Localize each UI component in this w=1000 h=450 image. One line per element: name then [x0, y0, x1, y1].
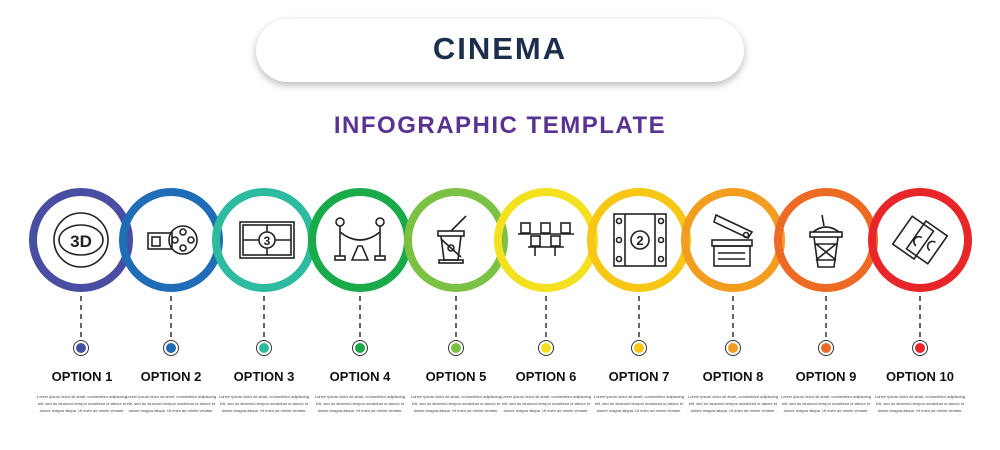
icon: 3D: [54, 213, 108, 267]
description texts: elit, sed do eiusmod tempor incididunt ut labore et: [220, 401, 308, 406]
option 7: OPTION 7: [609, 369, 669, 384]
option 4: [312, 192, 408, 384]
description texts: dolore magna aliqua. Ut enim ad minim veniam.: [691, 408, 775, 413]
subtitle: INFOGRAPHIC TEMPLATE: [334, 112, 666, 139]
description texts: dolore magna aliqua. Ut enim ad minim veniam.: [129, 408, 213, 413]
option 2: [123, 192, 219, 384]
description texts: Lorem ipsum dolor sit amet, consectetur adipiscing: [411, 394, 501, 399]
option 1: [33, 192, 129, 384]
description texts: elit, sed do eiusmod tempor incididunt ut labore et: [876, 401, 964, 406]
icon: soda cup: [438, 216, 466, 263]
option 9: [778, 192, 874, 384]
icon: film strip 2: 2: [636, 233, 644, 248]
description texts: elit, sed do eiusmod tempor incididunt ut labore et: [782, 401, 870, 406]
description texts: [37, 394, 965, 413]
description texts: Lorem ipsum dolor sit amet, consectetur adipiscing: [501, 394, 591, 399]
option 6: OPTION 6: [516, 369, 576, 384]
icon: seats: [518, 223, 574, 256]
description texts: elit, sed do eiusmod tempor incididunt ut labore et: [689, 401, 777, 406]
description texts: elit, sed do eiusmod tempor incididunt ut labore et: [38, 401, 126, 406]
option 2: OPTION 2: [141, 369, 201, 384]
description texts: dolore magna aliqua. Ut enim ad minim veniam.: [222, 408, 306, 413]
option 7: [591, 192, 687, 384]
icon: clapperboard: [712, 215, 752, 266]
icon: film reel: [148, 226, 197, 254]
option 6: [498, 192, 594, 384]
option 8: OPTION 8: [703, 369, 763, 384]
icon: film strip 2: [614, 214, 666, 266]
description texts: dolore magna aliqua. Ut enim ad minim veniam.: [597, 408, 681, 413]
option 1: OPTION 1: [52, 369, 112, 384]
option 5: OPTION 5: [426, 369, 486, 384]
description texts: dolore magna aliqua. Ut enim ad minim veniam.: [504, 408, 588, 413]
description texts: dolore magna aliqua. Ut enim ad minim veniam.: [414, 408, 498, 413]
option 9: OPTION 9: [796, 369, 856, 384]
description texts: Lorem ipsum dolor sit amet, consectetur adipiscing: [781, 394, 871, 399]
option 3: [216, 192, 312, 384]
description texts: dolore magna aliqua. Ut enim ad minim veniam.: [784, 408, 868, 413]
option 4: OPTION 4: [330, 369, 391, 384]
title: CINEMA: [433, 31, 567, 66]
option 8: [685, 192, 781, 384]
option 10: [872, 192, 968, 384]
icon: rope barrier: [335, 218, 385, 260]
icon: 3D: 3D: [70, 232, 92, 251]
description texts: Lorem ipsum dolor sit amet, consectetur adipiscing: [219, 394, 309, 399]
option 5: [408, 192, 504, 384]
description texts: elit, sed do eiusmod tempor incididunt ut labore et: [316, 401, 404, 406]
description texts: elit, sed do eiusmod tempor incididunt ut labore et: [412, 401, 500, 406]
description texts: Lorem ipsum dolor sit amet, consectetur adipiscing: [688, 394, 778, 399]
description texts: dolore magna aliqua. Ut enim ad minim veniam.: [318, 408, 402, 413]
description texts: Lorem ipsum dolor sit amet, consectetur adipiscing: [37, 394, 127, 399]
description texts: dolore magna aliqua. Ut enim ad minim veniam.: [878, 408, 962, 413]
description texts: Lorem ipsum dolor sit amet, consectetur adipiscing: [315, 394, 405, 399]
description texts: elit, sed do eiusmod tempor incididunt ut labore et: [502, 401, 590, 406]
icon: countdown 3: [240, 222, 294, 258]
description texts: Lorem ipsum dolor sit amet, consectetur adipiscing: [875, 394, 965, 399]
description texts: elit, sed do eiusmod tempor incididunt ut labore et: [127, 401, 215, 406]
icon: countdown 3: 3: [264, 234, 271, 248]
title pill: [256, 19, 744, 82]
option 3: OPTION 3: [234, 369, 294, 384]
description texts: Lorem ipsum dolor sit amet, consectetur adipiscing: [126, 394, 216, 399]
description texts: Lorem ipsum dolor sit amet, consectetur adipiscing: [594, 394, 684, 399]
description texts: dolore magna aliqua. Ut enim ad minim veniam.: [40, 408, 124, 413]
option 10: OPTION 10: [886, 369, 954, 384]
description texts: elit, sed do eiusmod tempor incididunt ut labore et: [595, 401, 683, 406]
icon: drink cup: [810, 215, 842, 267]
icon: tickets: [893, 213, 947, 267]
